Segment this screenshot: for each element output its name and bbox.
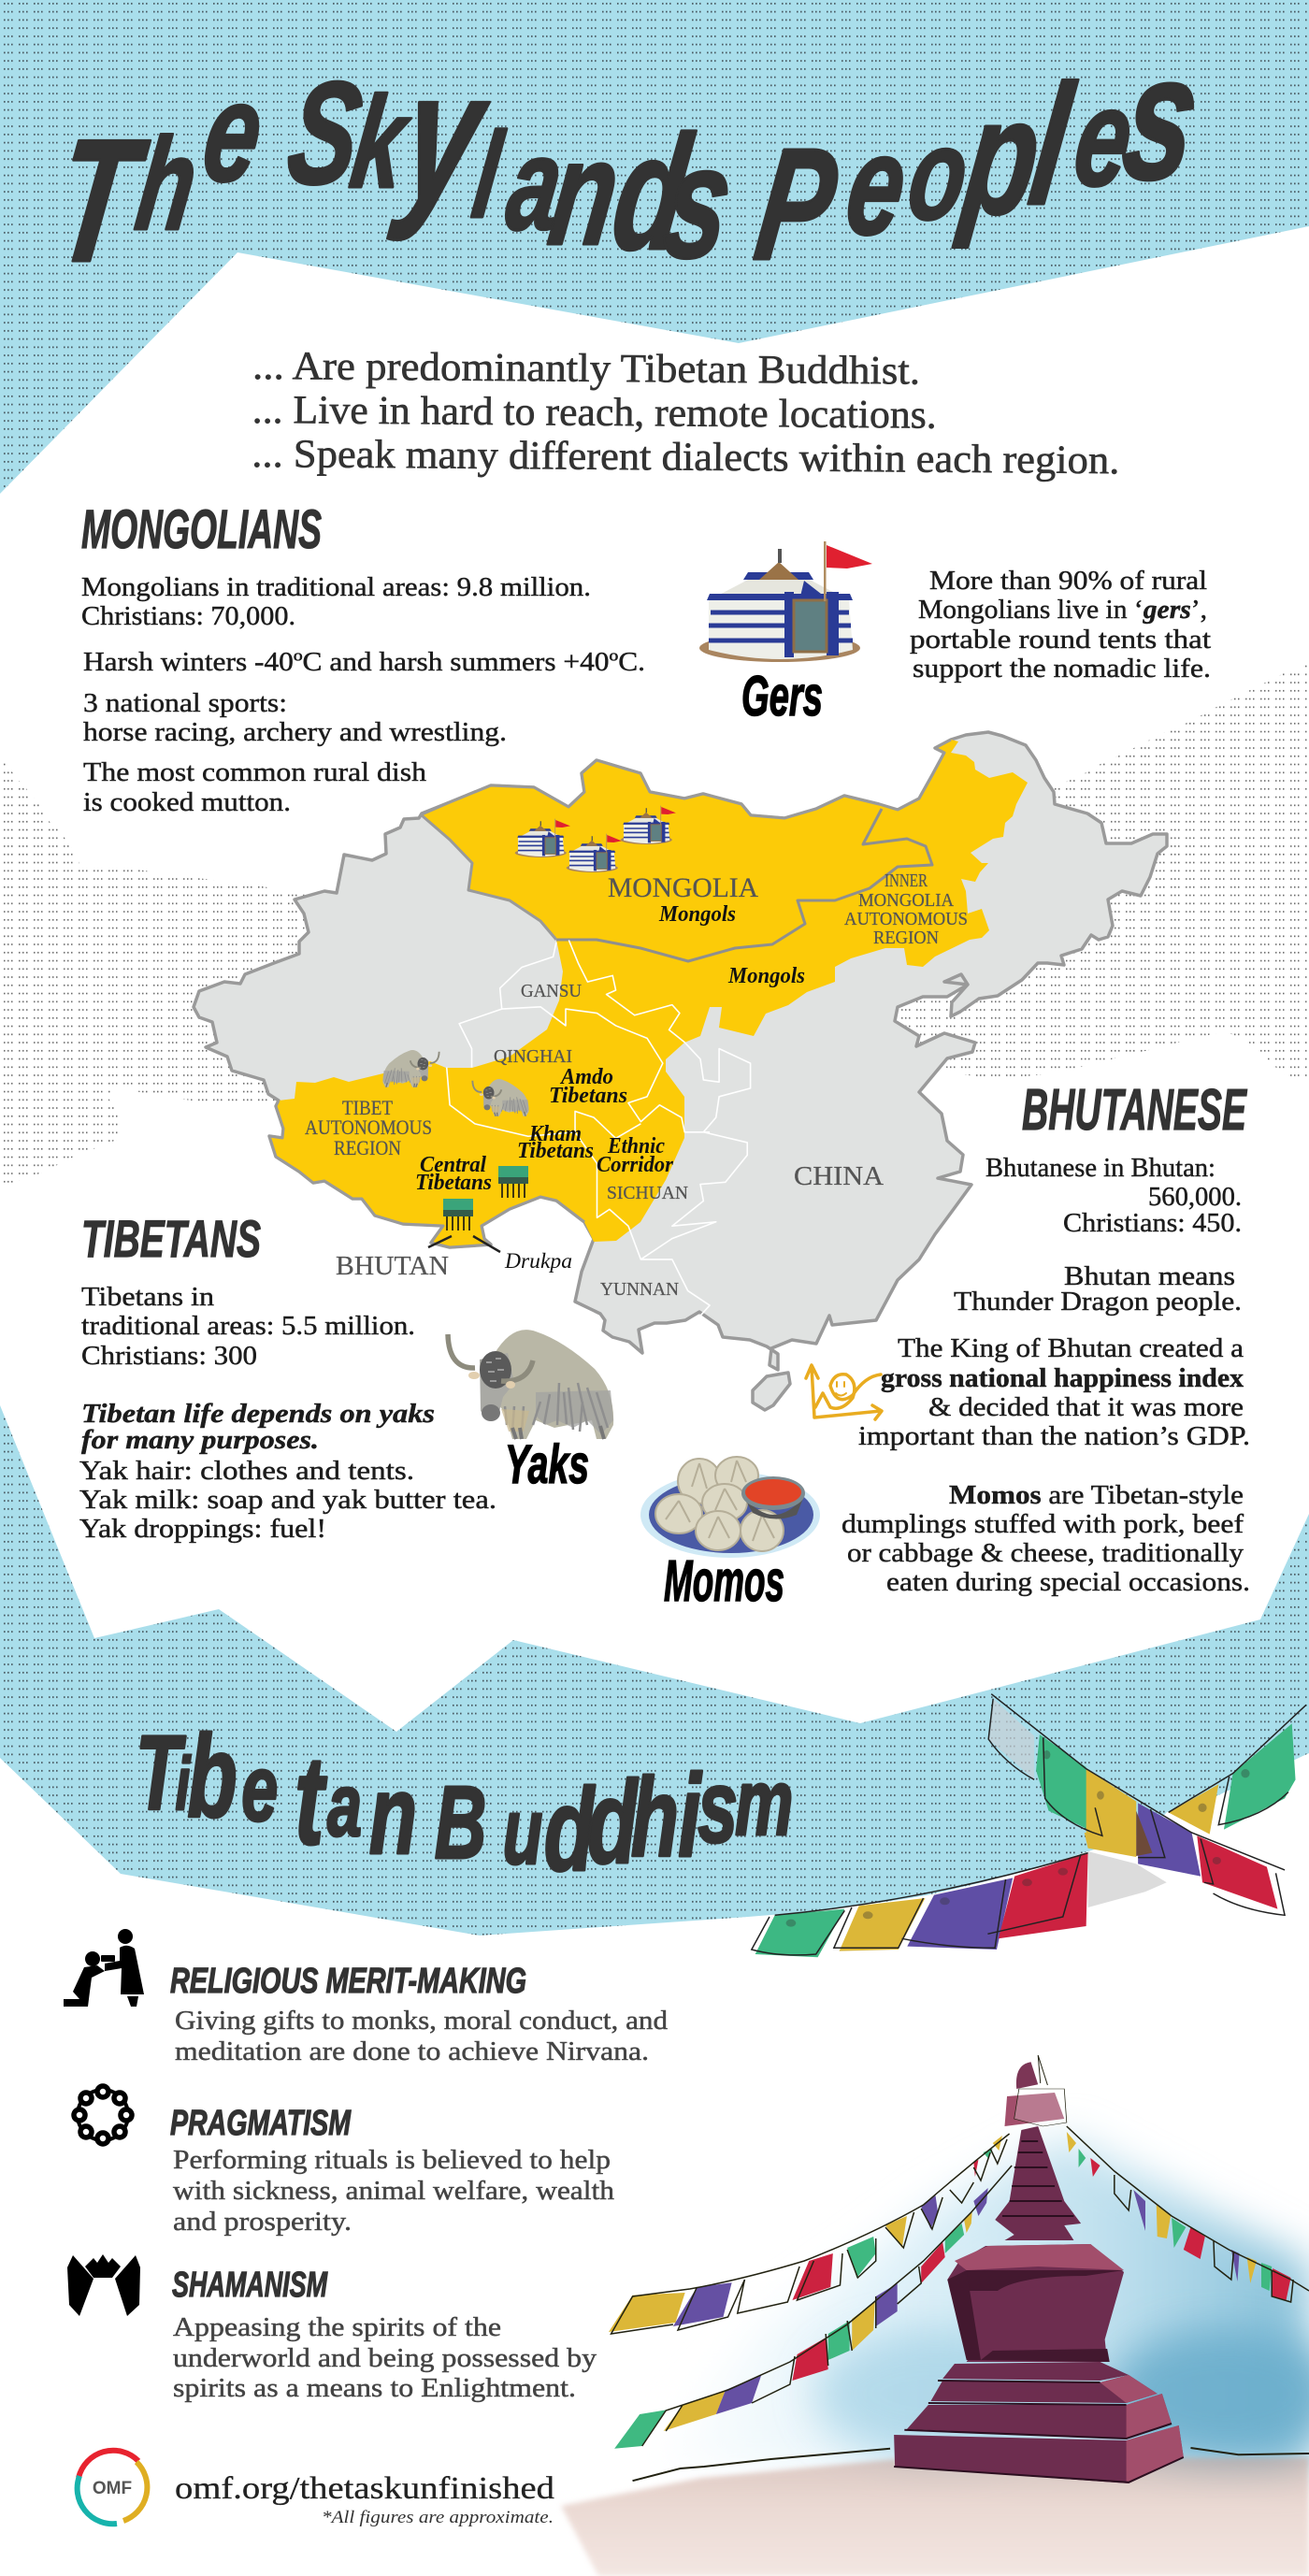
- map labels: REGION: [873, 928, 939, 948]
- text block: gers description: More than 90% of rural: [929, 567, 1207, 596]
- panel: pragmatism: [74, 2086, 614, 2237]
- map labels: AUTONOMOUS: [844, 909, 968, 929]
- label: yaks: Yaks: [505, 1434, 589, 1495]
- label: gers: Gers: [741, 665, 823, 727]
- heading: tibetans: TIBETANS: [81, 1209, 261, 1268]
- text block: tibetan facts: for many purposes.: [81, 1426, 319, 1455]
- title: y: [386, 32, 500, 241]
- stupa dome: [947, 2244, 1124, 2362]
- panel: religious merit-making: [64, 1929, 668, 2066]
- text block: mongolian facts: is cooked mutton.: [83, 788, 291, 817]
- text block: bhutanese facts: important than the nation’s GDP.: [858, 1422, 1250, 1451]
- panel: halftone dots around map: [0, 664, 1309, 1186]
- map labels: Kham: [528, 1122, 582, 1146]
- panel: mongolians: [81, 499, 1211, 817]
- title: n: [541, 109, 628, 277]
- map labels: CHINA: [794, 1161, 884, 1191]
- title: p: [952, 65, 1051, 249]
- map labels: AUTONOMOUS: [305, 1115, 432, 1139]
- map labels: Drukpa: [504, 1249, 572, 1273]
- map labels: GANSU: [521, 981, 583, 1001]
- heading: shamanism: SHAMANISM: [172, 2266, 328, 2305]
- text block: momos description: [842, 1481, 1250, 1597]
- heading: tibetan buddhism: a: [327, 1756, 362, 1855]
- heading: tibetan buddhism: n: [369, 1751, 417, 1877]
- title: h: [129, 110, 206, 257]
- title: e: [1066, 62, 1142, 215]
- map labels: [305, 871, 968, 1300]
- title: d: [603, 102, 700, 284]
- heading: pragmatism: PRAGMATISM: [170, 2104, 352, 2143]
- text block: momos description: Momos are Tibetan-style: [949, 1481, 1244, 1510]
- text block: tibetan facts: Tibetans in: [81, 1283, 214, 1312]
- stupa spire: [995, 2055, 1081, 2240]
- text block: gers description: portable round tents that: [910, 626, 1211, 655]
- title: a: [499, 110, 570, 257]
- map labels: Central: [420, 1153, 486, 1177]
- text block: bhutanese facts: Christians: 450.: [1063, 1209, 1242, 1238]
- icon: giving to monk: [64, 1929, 144, 2007]
- text block: shamanism: Appeasing the spirits of the: [173, 2313, 501, 2342]
- text block: mongolian facts: The most common rural dish: [83, 758, 426, 787]
- heading: tibetan buddhism: d: [544, 1763, 596, 1895]
- icon: yak in qinghai: [472, 1079, 529, 1116]
- text block: bhutanese facts: gross national happiness index: [881, 1364, 1244, 1393]
- text block: tibetan facts: Yak hair: clothes and tents.: [79, 1457, 414, 1486]
- panel: tibetans: [79, 1209, 613, 1544]
- intro text block: ... Are predominantly Tibetan Buddhist.: [252, 344, 920, 394]
- text block: bhutanese facts: Bhutan means: [1064, 1262, 1235, 1291]
- intro text block: [252, 344, 1120, 482]
- text block: bhutanese facts: Bhutanese in Bhutan:: [985, 1154, 1216, 1183]
- text block: pragmatism: and prosperity.: [173, 2208, 352, 2237]
- text block: shamanism: underworld and being possessed by: [173, 2344, 597, 2373]
- text block: mongolian facts: Harsh winters -40ºC and harsh summers +40ºC.: [83, 648, 645, 677]
- intro text block: ... Speak many different dialects within each region.: [252, 432, 1120, 482]
- title: e: [838, 105, 915, 264]
- text block: mongolian facts: horse racing, archery and wrestling.: [83, 718, 507, 747]
- heading: tibetan buddhism: d: [587, 1756, 639, 1888]
- icon: happiness chart: [806, 1365, 882, 1419]
- text block: merit-making: Giving gifts to monks, moral conduct, and: [175, 2007, 668, 2036]
- map labels: MONGOLIA: [608, 872, 758, 903]
- icons: small gers: [515, 806, 676, 872]
- text block: merit-making: [175, 2007, 668, 2066]
- map labels: Tibetans: [517, 1139, 594, 1163]
- text block: gers description: Mongolians live in ‘ gers’,: [918, 596, 1207, 625]
- map labels: REGION: [334, 1136, 401, 1159]
- heading: tibetan buddhism: m: [735, 1751, 793, 1855]
- title: o: [900, 102, 976, 247]
- text block: bhutanese facts: & decided that it was more: [928, 1393, 1244, 1422]
- prayer flags: right: [1067, 2126, 1309, 2302]
- heading: tibetan buddhism: u: [503, 1780, 542, 1884]
- heading: tibetan buddhism: i: [678, 1749, 702, 1881]
- prayer flags: left upper: [609, 2134, 1010, 2334]
- text block: gers description: support the nomadic life.: [913, 655, 1211, 684]
- title: s: [1113, 19, 1210, 216]
- map labels: TIBET: [342, 1096, 393, 1119]
- map region: skylands peoples highlighted: [269, 740, 1028, 1247]
- title: s: [654, 114, 742, 292]
- text block: pragmatism: [173, 2146, 614, 2237]
- prayer flags: upper string: [752, 1694, 1306, 1957]
- title: l: [1021, 49, 1083, 240]
- text block: bhutanese facts: 560,000.: [1148, 1183, 1242, 1212]
- panel: momos: [640, 1457, 1250, 1614]
- heading: tibetan buddhism: t: [295, 1730, 327, 1871]
- text block: bhutanese facts: Thunder Dragon people.: [954, 1288, 1242, 1317]
- title: k: [343, 70, 419, 215]
- map labels: YUNNAN: [600, 1279, 679, 1300]
- heading: tibetan buddhism: e: [241, 1737, 278, 1841]
- illustration: sky wash behind stupa: [645, 2137, 1309, 2468]
- text block: bhutanese facts: [858, 1154, 1250, 1451]
- panel: top sky background: [0, 0, 1309, 494]
- heading: tibetan buddhism: s: [698, 1750, 738, 1864]
- title: S: [280, 50, 370, 214]
- text block: tibetan facts: [79, 1283, 496, 1544]
- text block: merit-making: meditation are done to achieve Nirvana.: [175, 2037, 649, 2066]
- text block: mongolian facts: Christians: 70,000.: [81, 602, 295, 631]
- map labels: BHUTAN: [336, 1252, 449, 1281]
- text block: tibetan facts: Tibetan life depends on yaks: [81, 1400, 435, 1429]
- ground horizon lines: [633, 2448, 1309, 2481]
- title: P: [747, 116, 846, 294]
- map labels: Amdo: [559, 1065, 613, 1089]
- icon: ger: [699, 541, 872, 662]
- text block: momos description: eaten during special occasions.: [886, 1568, 1250, 1597]
- icon: plate of momos: [640, 1457, 820, 1558]
- url: omf.org/thetaskunfinished: [175, 2471, 554, 2506]
- text block: tibetan facts: traditional areas: 5.5 million.: [81, 1312, 415, 1341]
- illustration: stupa with prayer flags: [609, 2055, 1309, 2483]
- map land outline: [194, 732, 1167, 1370]
- heading: mongolians: MONGOLIANS: [81, 499, 322, 560]
- prayer flags: left lower: [614, 2166, 1012, 2449]
- heading: tibetan buddhism: h: [631, 1754, 679, 1879]
- footer: [78, 2451, 554, 2527]
- text block: bhutanese facts: The King of Bhutan created a: [898, 1334, 1244, 1363]
- map labels: Tibetans: [415, 1171, 492, 1195]
- text block: shamanism: spirits as a means to Enlightment.: [173, 2374, 576, 2403]
- text block: mongolian facts: Mongolians in traditional areas: 9.8 million.: [81, 573, 591, 602]
- map labels: Corridor: [597, 1153, 674, 1177]
- icons: bhutan and tibet tree groups: [443, 1166, 528, 1230]
- text block: shamanism: [173, 2313, 597, 2403]
- illustration: ground wash: [561, 2455, 1309, 2576]
- map labels: Ethnic: [607, 1134, 665, 1158]
- text block: gers description: [910, 567, 1211, 684]
- map of china and mongolia: [194, 732, 1167, 1410]
- intro text block: ... Live in hard to reach, remote locations.: [252, 388, 937, 438]
- text block: tibetan facts: Christians: 300: [81, 1342, 257, 1371]
- heading: tibetan buddhism: T: [136, 1714, 186, 1832]
- icon: shaman headdress: [67, 2254, 140, 2316]
- map labels: Tibetans: [549, 1084, 627, 1108]
- panel: lower sky background: [0, 1405, 1309, 1936]
- province borders: [447, 940, 751, 1316]
- icon: prayer beads: [74, 2086, 132, 2144]
- map labels: Mongols: [658, 902, 736, 927]
- map labels: SICHUAN: [607, 1183, 688, 1203]
- icon: yak on tibet border: [382, 1050, 439, 1087]
- footnote: *All figures are approximate.: [322, 2508, 554, 2527]
- text block: momos description: or cabbage & cheese, traditionally: [847, 1539, 1244, 1568]
- stupa base tiers: [894, 2362, 1184, 2483]
- title: l: [466, 108, 511, 243]
- panel: shamanism: [67, 2254, 597, 2403]
- heading: tibetan buddhism: B: [435, 1766, 486, 1880]
- map labels: MONGOLIA: [858, 890, 955, 911]
- label: momos: Momos: [664, 1549, 784, 1614]
- text block: mongolian facts: 3 national sports:: [83, 689, 287, 718]
- text block: pragmatism: Performing rituals is believed to help: [173, 2146, 611, 2175]
- icon: large yak: [448, 1330, 613, 1439]
- logo: omf: OMF: [93, 2479, 132, 2498]
- map labels: INNER: [885, 871, 928, 891]
- map outline over yellow: [422, 740, 951, 818]
- logo: omf: [78, 2451, 147, 2524]
- map labels: QINGHAI: [494, 1046, 572, 1067]
- panel: bhutanese: [806, 1078, 1250, 1451]
- text block: momos description: dumplings stuffed with pork, beef: [842, 1510, 1244, 1539]
- heading: religious merit-making: RELIGIOUS MERIT-MAKING: [170, 1962, 526, 2001]
- text block: mongolian facts: [81, 573, 645, 817]
- text block: pragmatism: with sickness, animal welfare, wealth: [173, 2177, 614, 2206]
- bhutan pointer lines: [428, 1236, 500, 1252]
- heading: tibetan buddhism: i: [176, 1741, 192, 1825]
- text block: tibetan facts: Yak milk: soap and yak butter tea.: [79, 1486, 496, 1515]
- map labels: Mongols: [727, 964, 805, 988]
- title: e: [194, 53, 271, 210]
- title: T: [45, 104, 156, 298]
- heading: tibetan buddhism: b: [187, 1710, 237, 1842]
- text block: tibetan facts: Yak droppings: fuel!: [79, 1515, 326, 1544]
- map land: hainan island: [753, 1373, 790, 1410]
- mongolia border: [556, 809, 932, 961]
